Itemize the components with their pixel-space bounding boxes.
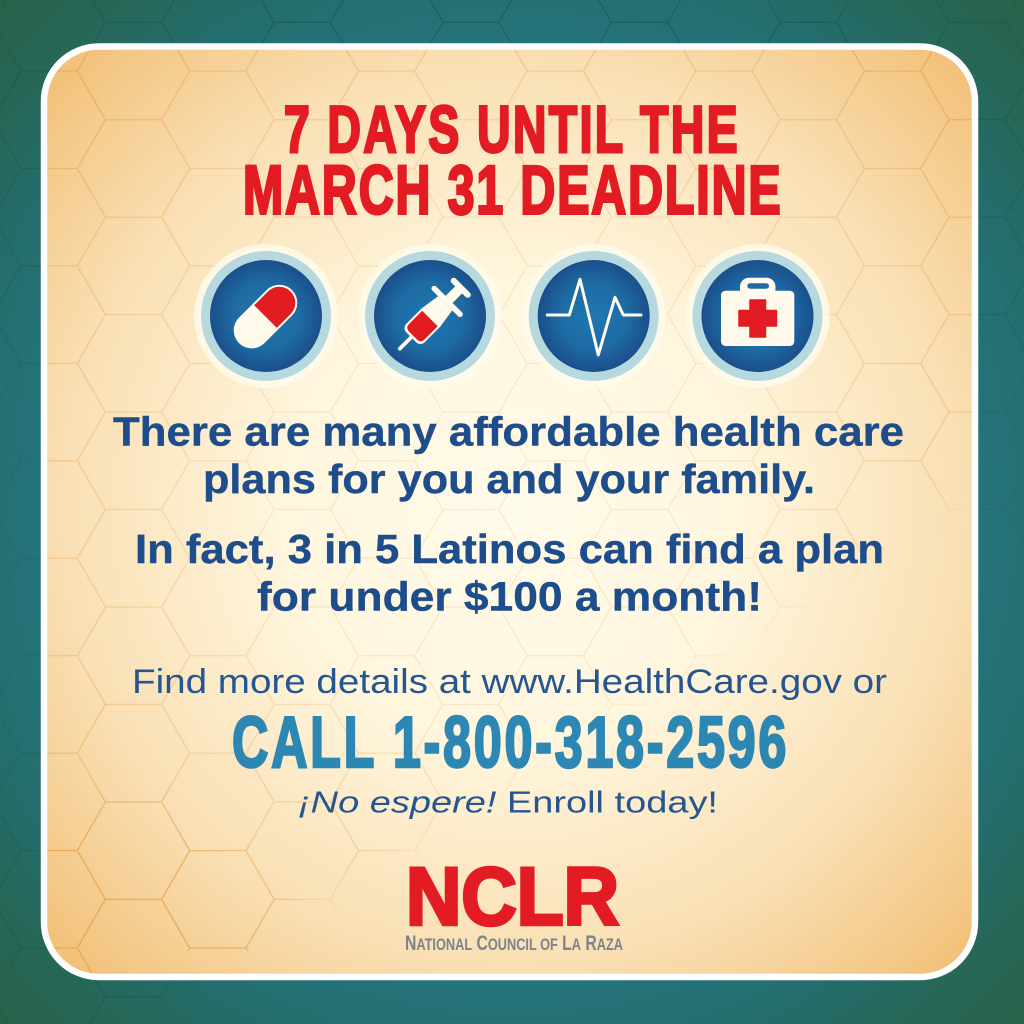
text block: 3 in 5 Latinos <box>135 526 884 620</box>
text: enroll today: ¡No espere! Enroll today! <box>298 785 718 820</box>
text block: affordable plans <box>113 409 904 502</box>
title: 7 DAYS UNTIL THE <box>284 93 738 167</box>
icon: first aid kit <box>686 244 830 388</box>
text block: 3 in 5 Latinos: for under $100 a month! <box>257 574 762 620</box>
text block: 3 in 5 Latinos: In fact, 3 in 5 Latinos can find a plan <box>135 526 884 572</box>
icon: syringe <box>358 244 502 388</box>
icon: heartbeat line <box>522 244 666 388</box>
text: find more details: Find more details at www.HealthCare.gov or <box>132 663 887 701</box>
title <box>243 93 781 229</box>
icon: pill <box>194 244 338 388</box>
title: MARCH 31 DEADLINE <box>243 151 781 229</box>
logo: NCLR: NATIONAL COUNCIL OF LA RAZA <box>405 932 623 955</box>
text block: affordable plans: plans for you and your family. <box>203 456 815 502</box>
text: phone number: CALL 1-800-318-2596 <box>232 703 786 783</box>
text block: affordable plans: There are many affordable health care <box>113 409 904 455</box>
logo: NCLR: NCLR <box>406 852 619 942</box>
